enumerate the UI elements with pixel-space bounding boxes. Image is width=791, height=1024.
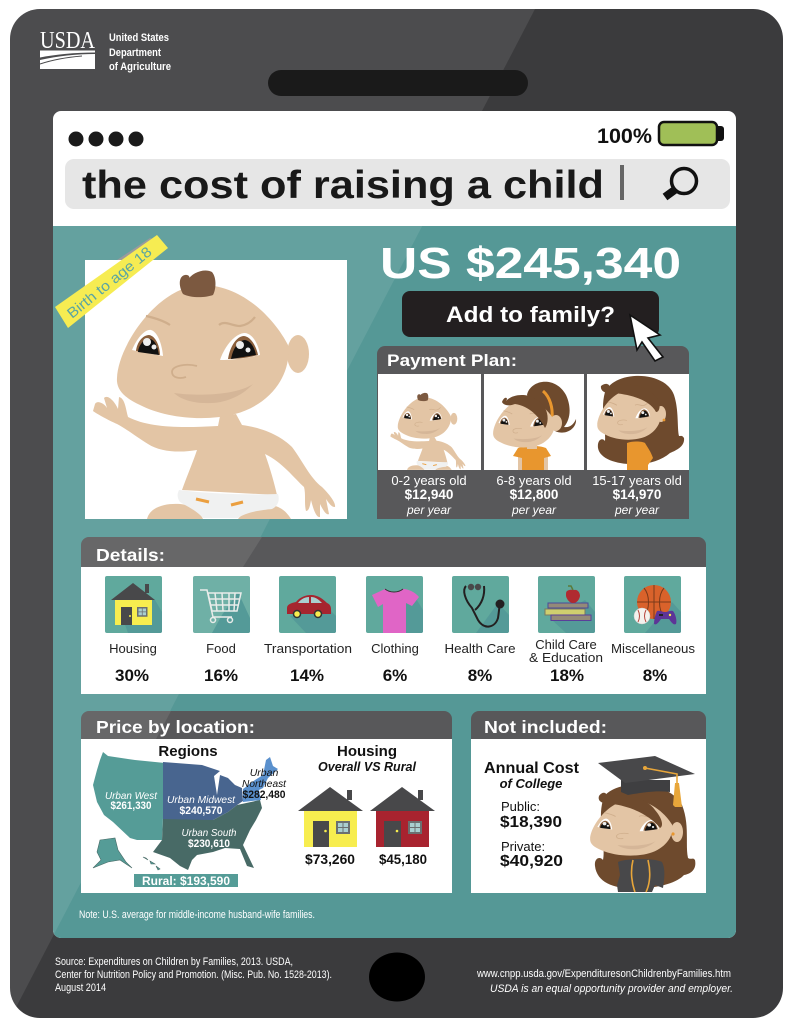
label: health care: 8% [468, 666, 492, 685]
source credit: Source: Expenditures on Children by Families, 2013. USDA, [55, 956, 293, 968]
price: 15-17 years: $14,970 [613, 487, 661, 502]
label: food: 16% [204, 666, 238, 685]
illustration: graduate [590, 756, 695, 892]
note: Note: U.S. average for middle-income husband-wife families. [79, 909, 315, 921]
source credit: August 2014 [55, 982, 106, 994]
label: urban northeast: Northeast [242, 778, 287, 790]
label: clothing: Clothing [371, 641, 419, 656]
label: child care and education: & Education [529, 650, 603, 665]
home button [369, 952, 425, 1002]
icon: rural house [370, 787, 435, 847]
label: transportation [264, 641, 352, 685]
region: west [93, 752, 165, 840]
USDA logo [40, 28, 96, 69]
ribbon: birth to age 18 [55, 235, 168, 328]
label: urban west: Urban West [105, 790, 158, 802]
heading: details: Details: [96, 545, 165, 565]
price: overall housing: $73,260 [305, 852, 355, 867]
panel: details [81, 537, 706, 694]
total cost: US $245,340 [380, 239, 681, 288]
price: 6-8 years: $12,800 [510, 487, 558, 502]
heading: regions: Regions [158, 743, 218, 760]
price: 0-2 years: $12,940 [405, 487, 453, 502]
heading: annual cost of college: of College [500, 776, 562, 791]
label: urban northeast: $282,480 [242, 789, 286, 801]
panel: price by location [81, 711, 452, 893]
status dots [68, 132, 144, 146]
label: child care and education [529, 637, 603, 685]
price: 0-2 years: per year [406, 503, 452, 517]
icon: clothing [366, 576, 423, 633]
label: miscellaneous [611, 641, 696, 685]
label: miscellaneous: 8% [643, 666, 667, 685]
price: 15-17 years: 15-17 years old [592, 473, 682, 488]
label: food [204, 641, 238, 685]
department name [109, 32, 171, 73]
website and equal opportunity statement [476, 968, 733, 995]
price: 0-2 years [391, 473, 467, 517]
label: health care [444, 641, 516, 685]
label: child care and education: Child Care [535, 637, 597, 652]
label: urban midwest: Urban Midwest [167, 794, 236, 806]
icon: miscellaneous [624, 576, 681, 633]
label: urban south: $230,610 [188, 838, 230, 850]
heading: housing [318, 743, 417, 774]
label: urban west: $261,330 [110, 800, 152, 812]
screen [53, 111, 736, 938]
price: 15-17 years: per year [614, 503, 660, 517]
label: health care: Health Care [444, 641, 516, 656]
source credit [55, 956, 332, 994]
speaker [268, 70, 528, 96]
price: rural housing: $45,180 [379, 852, 427, 867]
label: urban south: Urban South [182, 827, 237, 839]
label: clothing: 6% [383, 666, 407, 685]
text cursor [620, 165, 624, 200]
icon: housing [105, 576, 162, 633]
price: 6-8 years: per year [511, 503, 557, 517]
public cost: $18,390 [500, 814, 562, 831]
panel: payment plan [377, 346, 689, 519]
region: midwest [163, 762, 243, 820]
USDA logo: USDA [40, 28, 96, 54]
public cost [500, 799, 562, 831]
icon: transportation [279, 576, 336, 633]
price: 6-8 years [496, 473, 572, 517]
region: alaska and hawaii [93, 838, 160, 870]
region: south [153, 800, 262, 870]
label: child care and education: 18% [550, 666, 584, 685]
icon: health care [452, 576, 509, 633]
private cost: $40,920 [500, 853, 563, 870]
panel: baby portrait [85, 260, 347, 519]
price: 0-2 years: 0-2 years old [391, 473, 467, 488]
panel: not included [471, 711, 706, 893]
label: rural: Rural: $193,590 [142, 874, 230, 888]
label: transportation: Transportation [264, 641, 352, 656]
tile: baby [378, 374, 481, 470]
price: 6-8 years: 6-8 years old [496, 473, 572, 488]
website and equal opportunity statement: www.cnpp.usda.gov/ExpendituresonChildrenbyFamilies.htm [476, 968, 731, 980]
label: urban west [105, 790, 158, 812]
label: urban northeast [242, 767, 287, 801]
price: 15-17 years [592, 473, 682, 517]
source credit: Center for Nutrition Policy and Promotion. (Misc. Pub. No. 1528-2013). [55, 969, 332, 981]
label: urban northeast: Urban [250, 767, 278, 779]
label: miscellaneous: Miscellaneous [611, 641, 696, 656]
department name: Department [109, 47, 161, 59]
heading: annual cost of college [484, 760, 579, 791]
label: clothing [371, 641, 419, 685]
website and equal opportunity statement: USDA is an equal opportunity provider and employer. [490, 983, 733, 995]
private cost [500, 839, 563, 870]
label: housing: 30% [115, 666, 149, 685]
search bar [65, 159, 730, 209]
heading: price by location: Price by location: [96, 717, 255, 737]
title: the cost of raising a child [82, 164, 604, 207]
label: transportation: 14% [290, 666, 324, 685]
map: US regions [93, 752, 287, 870]
label: food: Food [206, 641, 236, 656]
tile: teen [587, 374, 689, 470]
battery percentage: 100% [597, 125, 652, 148]
icon: overall house [298, 787, 363, 847]
ribbon: birth to age 18: Birth to age 18 [64, 244, 155, 322]
icon: child care and education [538, 576, 595, 633]
heading: housing: Housing [337, 743, 397, 760]
label: urban midwest: $240,570 [180, 805, 222, 817]
tile: child [484, 374, 584, 470]
region: northeast [243, 757, 278, 802]
button: add to family: Add to family? [446, 302, 615, 327]
icon: mouse pointer [630, 315, 663, 361]
heading: annual cost of college: Annual Cost [484, 760, 579, 777]
label: urban midwest [167, 794, 236, 817]
department name: of Agriculture [109, 61, 171, 73]
illustration: baby [93, 270, 335, 519]
icon: battery [659, 122, 724, 145]
label: housing: Housing [109, 641, 157, 656]
heading: housing: Overall VS Rural [318, 760, 417, 774]
public cost: Public: [501, 799, 540, 814]
department name: United States [109, 32, 169, 44]
label: housing [109, 641, 157, 685]
heading: payment plan: Payment Plan: [387, 352, 517, 370]
label: urban south [182, 827, 237, 850]
private cost: Private: [501, 839, 545, 854]
heading: not included: Not included: [484, 717, 607, 737]
button: add to family [402, 291, 659, 337]
icon: magnifier [665, 168, 696, 197]
icon: food [193, 576, 250, 633]
